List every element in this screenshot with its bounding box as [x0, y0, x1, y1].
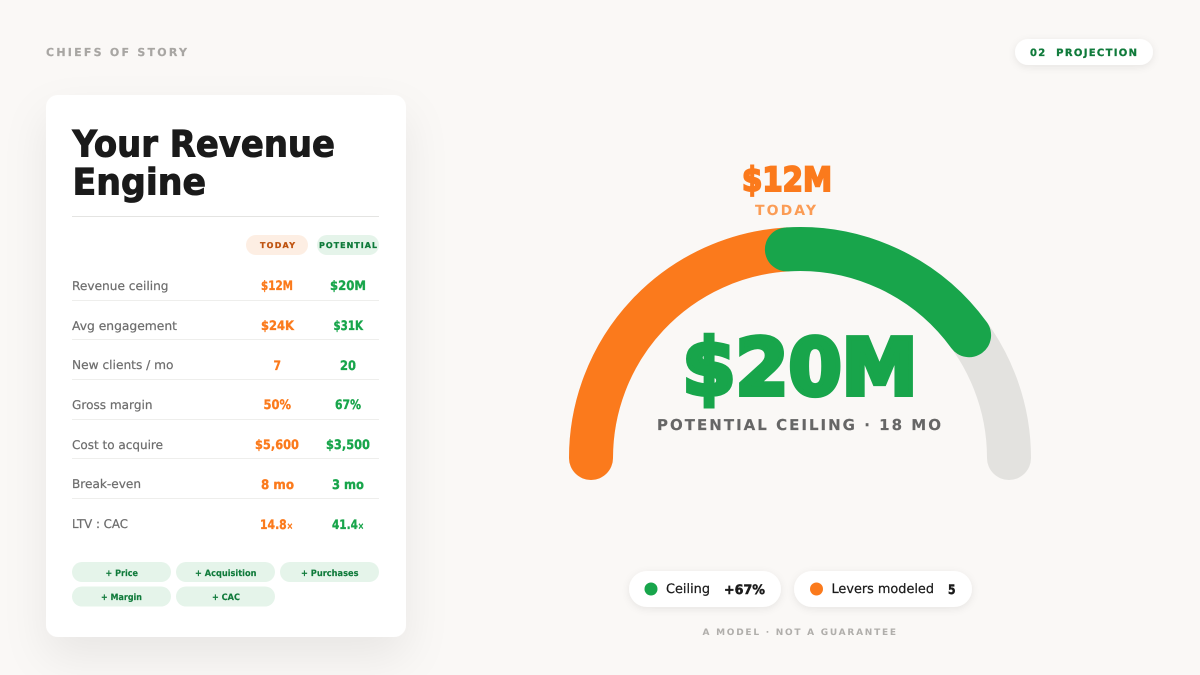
- row: new clients per month: 7: [274, 359, 281, 374]
- chip: margin: [72, 586, 171, 606]
- chip: cac: [176, 586, 275, 606]
- row: break-even: 3 mo: [332, 478, 364, 493]
- potential ceiling value: POTENTIAL CEILING · 18 MO: [657, 416, 941, 434]
- row: cost to acquire: $5,600: [255, 438, 299, 453]
- gauge arc: potential: [787, 249, 969, 335]
- heading: Engine: [72, 160, 206, 204]
- stat pill: levers modeled: Levers modeled: [832, 582, 934, 597]
- row: revenue ceiling: Revenue ceiling: [72, 279, 168, 293]
- row: ltv to cac: LTV : CAC: [72, 517, 128, 531]
- row: break-even: Break-even: [72, 477, 141, 491]
- panel: revenue engine table card: [46, 95, 406, 637]
- row: ltv to cac: 14.8×: [260, 518, 293, 533]
- column header: potential: [317, 235, 379, 255]
- chip: acquisition: [176, 562, 275, 582]
- row: cost to acquire: [72, 438, 379, 458]
- row: avg engagement: Avg engagement: [72, 319, 177, 333]
- stat pill: ceiling: [629, 571, 781, 607]
- row: ltv to cac: 41.4×: [332, 518, 364, 533]
- section badge: 02 projection: [1015, 39, 1153, 65]
- stat pill: ceiling: Ceiling: [666, 582, 710, 597]
- today value: TODAY: [755, 203, 817, 219]
- row: new clients per month: 20: [340, 359, 356, 374]
- row: ltv to cac: [72, 517, 364, 533]
- row: cost to acquire: Cost to acquire: [72, 438, 163, 452]
- potential ceiling value: [657, 324, 941, 434]
- heading: [72, 122, 335, 204]
- row: avg engagement: $24K: [261, 319, 295, 334]
- row: gross margin: 50%: [264, 398, 291, 413]
- row: gross margin: 67%: [335, 398, 361, 413]
- row: gross margin: Gross margin: [72, 398, 152, 412]
- row: new clients per month: [72, 358, 379, 380]
- row: revenue ceiling: $12M: [261, 279, 293, 294]
- chip: purchases: [280, 562, 379, 582]
- row: avg engagement: $31K: [334, 319, 364, 334]
- section badge: 02 projection: 02 PROJECTION: [1030, 48, 1137, 59]
- row: new clients per month: New clients / mo: [72, 358, 174, 372]
- today value: [742, 160, 832, 219]
- row: break-even: 8 mo: [261, 478, 294, 493]
- row: revenue ceiling: $20M: [330, 279, 366, 294]
- gauge arc: today: [591, 249, 787, 458]
- row: cost to acquire: $3,500: [326, 438, 370, 453]
- row: break-even: [72, 477, 379, 498]
- brand label: CHIEFS OF STORY: [46, 46, 188, 59]
- chip: cac: + CAC: [212, 593, 240, 603]
- row: revenue ceiling: [72, 279, 379, 300]
- heading: Your Revenue: [72, 122, 335, 166]
- chip: acquisition: + Acquisition: [195, 569, 256, 579]
- footnote: A MODEL · NOT A GUARANTEE: [702, 628, 896, 638]
- row: avg engagement: [72, 319, 379, 340]
- chip: margin: + Margin: [101, 593, 142, 603]
- column header: potential: POTENTIAL: [319, 241, 377, 250]
- gauge track: [591, 249, 1009, 458]
- chip: price: [72, 562, 171, 582]
- column header: today: [246, 235, 308, 255]
- stat pill: levers modeled: [794, 571, 972, 607]
- today value: $12M: [742, 160, 832, 199]
- chip: price: + Price: [106, 569, 138, 579]
- stat pill: ceiling: +67%: [724, 583, 765, 598]
- semicircular gauge: [591, 249, 1009, 458]
- potential ceiling value: $20M: [682, 324, 918, 414]
- row: gross margin: [72, 398, 379, 420]
- column header: today: TODAY: [260, 241, 295, 250]
- stat pill: levers modeled: 5: [948, 583, 956, 598]
- chip: purchases: + Purchases: [301, 569, 358, 579]
